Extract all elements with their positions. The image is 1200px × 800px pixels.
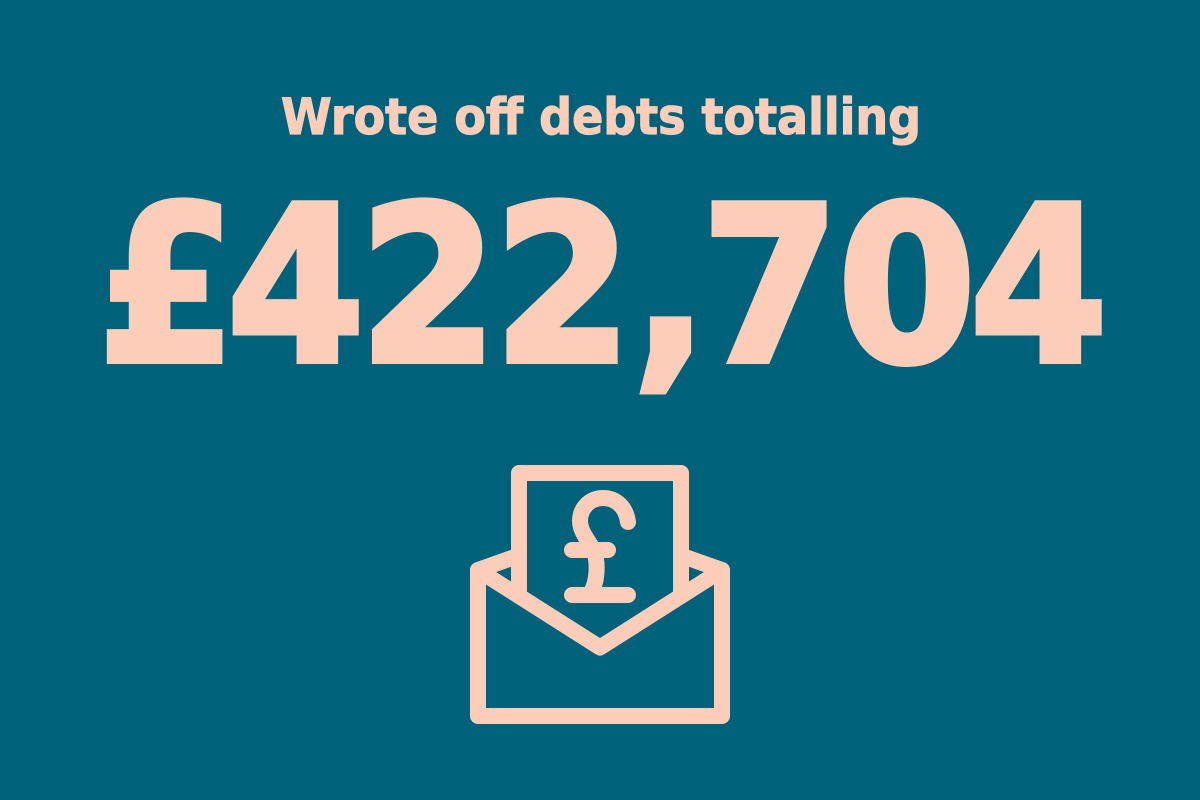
big number: £422,704: [98, 161, 1108, 411]
envelope body: [478, 570, 722, 716]
icon: envelope with pound note: [478, 473, 722, 716]
letter sheet: [519, 473, 681, 592]
heading: Wrote off debts totalling: [281, 88, 921, 146]
envelope back flaps: [478, 556, 722, 570]
icon: pound sign: [572, 498, 628, 595]
